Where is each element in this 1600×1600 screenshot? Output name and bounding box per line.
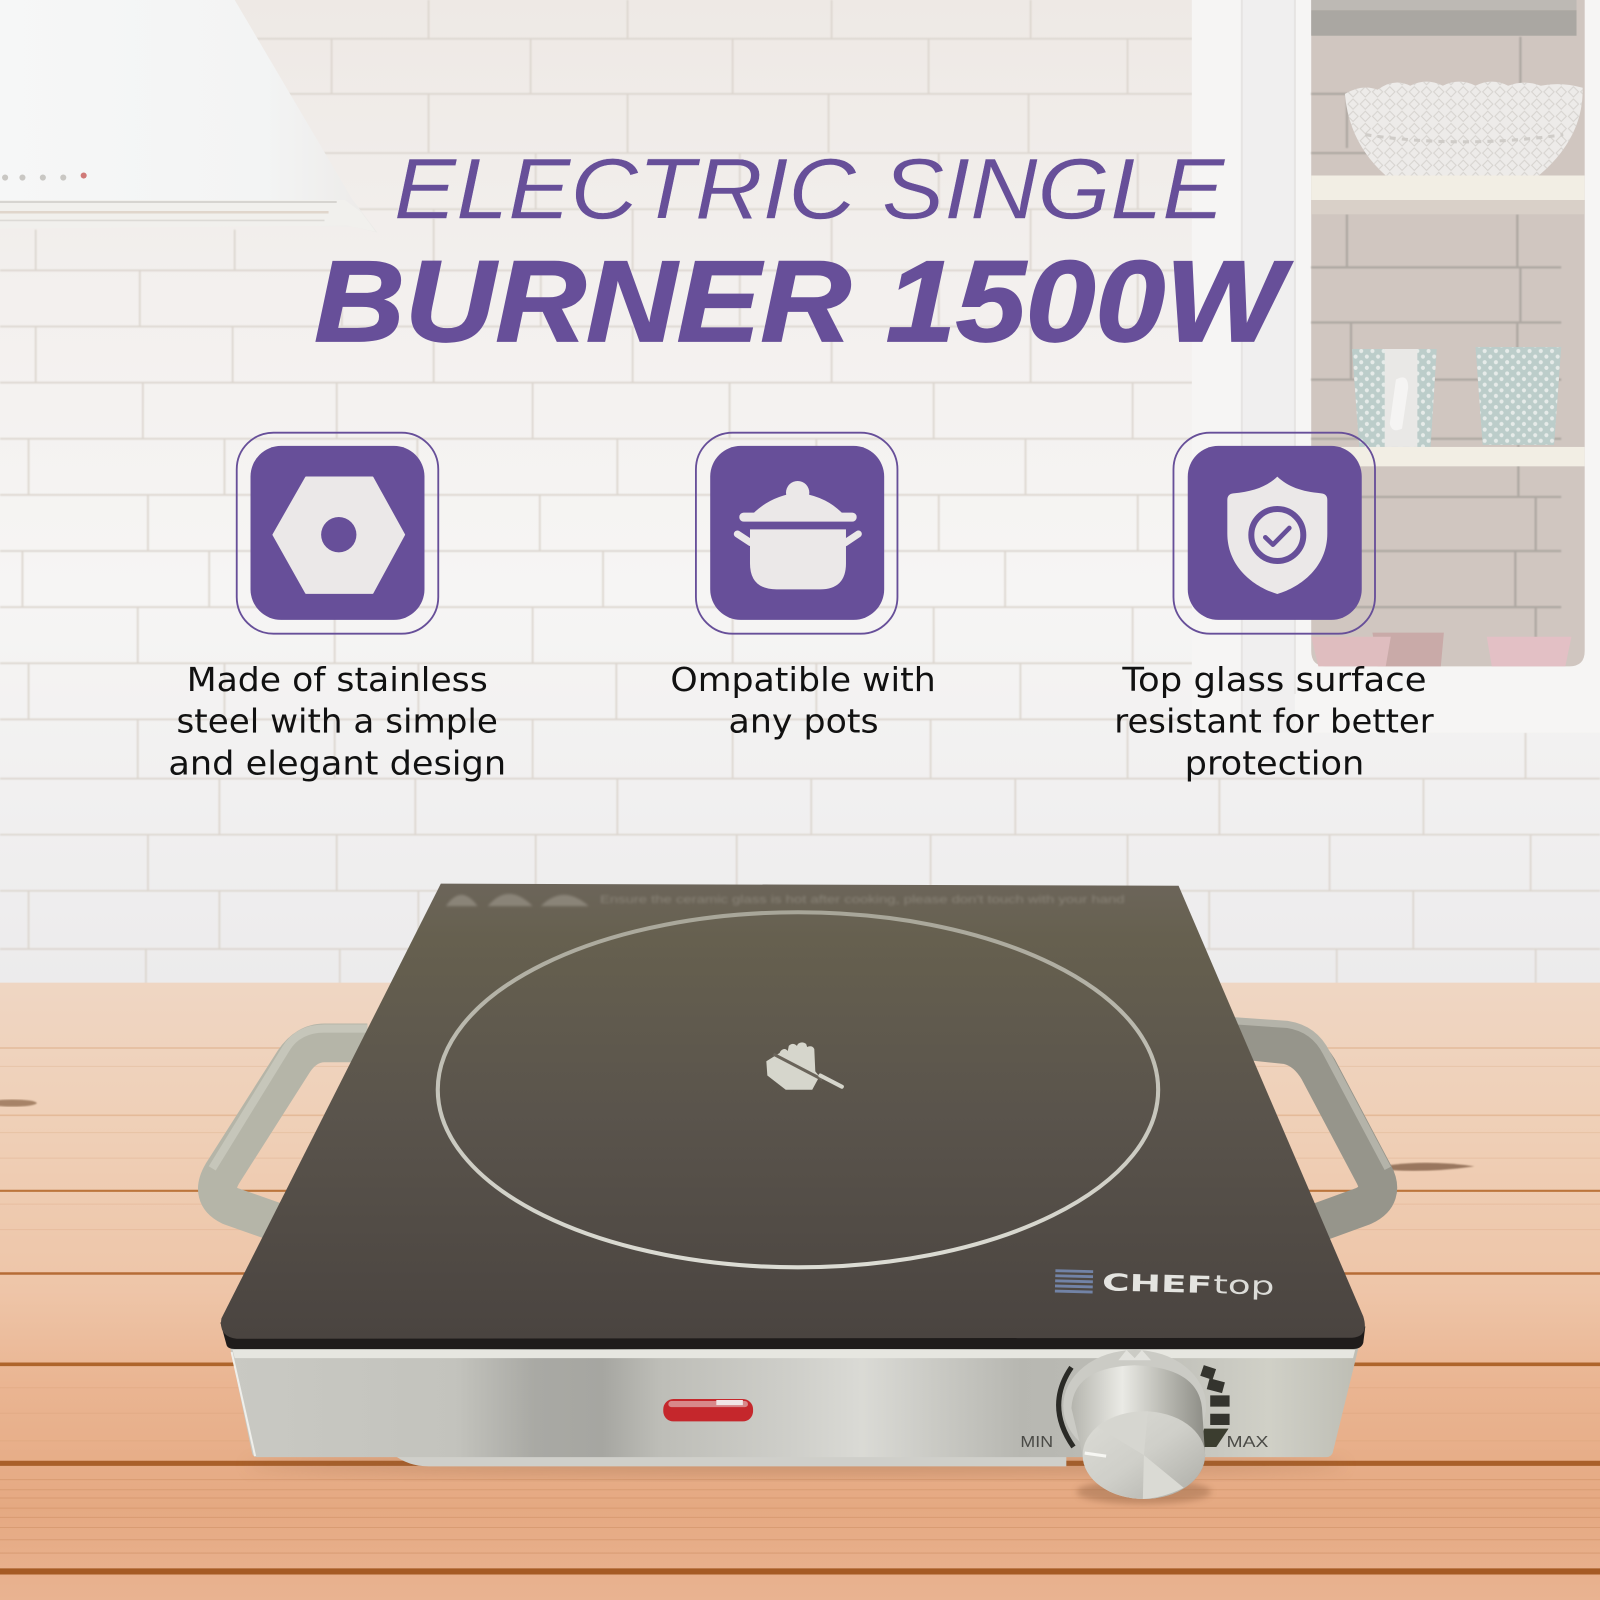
icon: dotted mug (1476, 347, 1561, 445)
shelf: upper (1311, 176, 1585, 214)
left handle (212, 1029, 367, 1233)
cast shadow (245, 1457, 1347, 1473)
right handle (1230, 1020, 1388, 1231)
feature text: glass surface: protection (1185, 744, 1364, 782)
icon: lace bowl (1345, 82, 1583, 176)
glass top (221, 884, 1365, 1339)
icon: shield with check (1173, 433, 1375, 634)
feature text: stainless steel: Made of stainless (187, 661, 488, 699)
icon: cooking pot (696, 433, 897, 634)
brand logo: top (1213, 1270, 1275, 1302)
cooking zone ring (438, 912, 1158, 1267)
feature text: stainless steel (168, 661, 506, 782)
printed warning on glass (446, 894, 1124, 906)
wood knot right (1383, 1163, 1474, 1171)
printed warning on glass: Ensure the ceramic glass is hot after cooking, please don't touch with your hand (600, 894, 1124, 906)
title line 1: ELECTRIC SINGLE (394, 140, 1226, 237)
title (314, 140, 1294, 366)
icon: mug with handle (1352, 349, 1437, 447)
feature text: glass surface: Top glass surface (1121, 661, 1427, 699)
feature text: pots: any pots (729, 703, 879, 741)
brand logo (1055, 1266, 1275, 1302)
icon: pink cups (1311, 633, 1571, 666)
dial scale: MIN (1020, 1434, 1053, 1451)
feature text: stainless steel: steel with a simple (177, 703, 498, 741)
feature text: pots (670, 661, 936, 741)
glass dark edge (220, 1322, 1365, 1349)
brand logo: CHEF (1102, 1268, 1213, 1299)
feature text: glass surface (1114, 661, 1434, 782)
brick wall background (0, 0, 1600, 985)
icon: hand warning (766, 1042, 842, 1090)
feature text: stainless steel: and elegant design (168, 744, 506, 782)
feature text: glass surface: resistant for better (1114, 703, 1434, 741)
range hood (0, 0, 378, 233)
lip under body (393, 1454, 1066, 1466)
feature text: pots: Ompatible with (670, 661, 936, 699)
shelf: lower (1311, 447, 1585, 466)
power indicator (663, 1399, 753, 1421)
icon: hexagon nut (237, 433, 438, 634)
steel front panel (230, 1345, 1359, 1457)
control knob (1063, 1350, 1211, 1504)
cabinet interior (1311, 0, 1585, 666)
title line 2: BURNER 1500W (314, 238, 1294, 366)
dial scale (1020, 1367, 1268, 1451)
logo waves (1055, 1271, 1093, 1292)
wooden countertop (0, 983, 1600, 1600)
wood knot left (0, 1099, 37, 1107)
product: electric burner (212, 884, 1388, 1504)
glass cabinet (1192, 0, 1600, 733)
dial scale: MAX (1227, 1434, 1268, 1451)
